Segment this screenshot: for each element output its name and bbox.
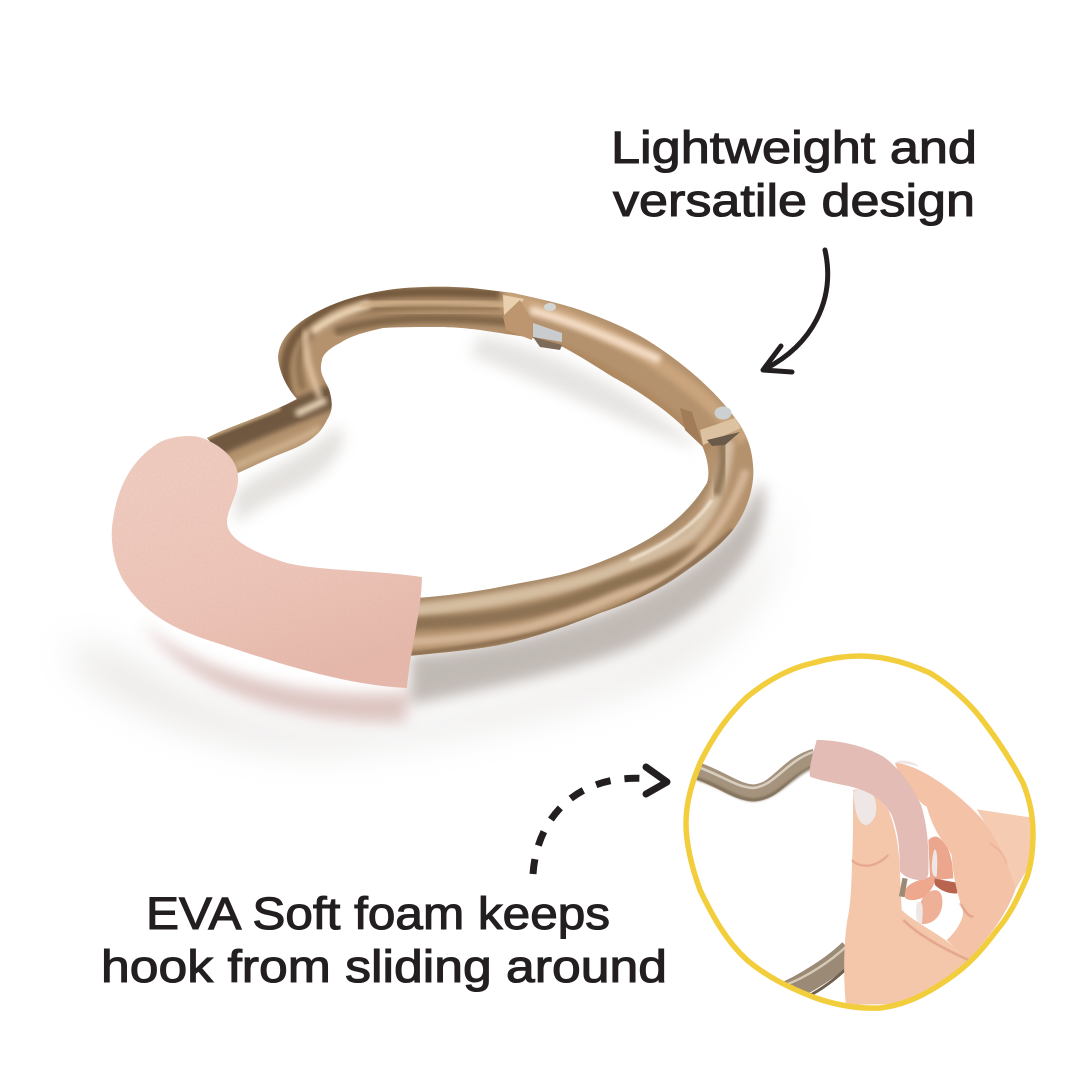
caption: EVA soft foam: hook from sliding around (101, 941, 667, 992)
caption: EVA soft foam: EVA Soft foam keeps (146, 888, 610, 939)
lower ring (415, 480, 708, 599)
product shadow (65, 335, 780, 750)
small rod behind fingers (902, 878, 905, 897)
inset yellow outline (686, 656, 1033, 1008)
zigzag vertical part (285, 292, 500, 400)
ring highlights (195, 292, 746, 655)
fingernails (853, 760, 937, 924)
arrow: pointing to ring (763, 250, 828, 372)
inset hand (844, 760, 1037, 1005)
bent left tube (195, 395, 335, 455)
heading: lightweight and versatile design: Lightweight and (611, 122, 977, 173)
caption: EVA soft foam (101, 888, 667, 992)
inset hook rod (695, 752, 850, 998)
inset foam (810, 740, 929, 880)
dashed arrow: pointing to inset (533, 767, 667, 874)
heading: lightweight and versatile design: versatile design (613, 175, 975, 226)
heading: lightweight and versatile design (611, 122, 977, 226)
inset circle: hand squeezing foam (680, 650, 1040, 1015)
gate hinge and rivets (503, 295, 741, 447)
top right arc (505, 298, 745, 440)
EVA soft foam grip (112, 436, 422, 688)
product: heart-shaped metal hook ring (112, 287, 753, 688)
